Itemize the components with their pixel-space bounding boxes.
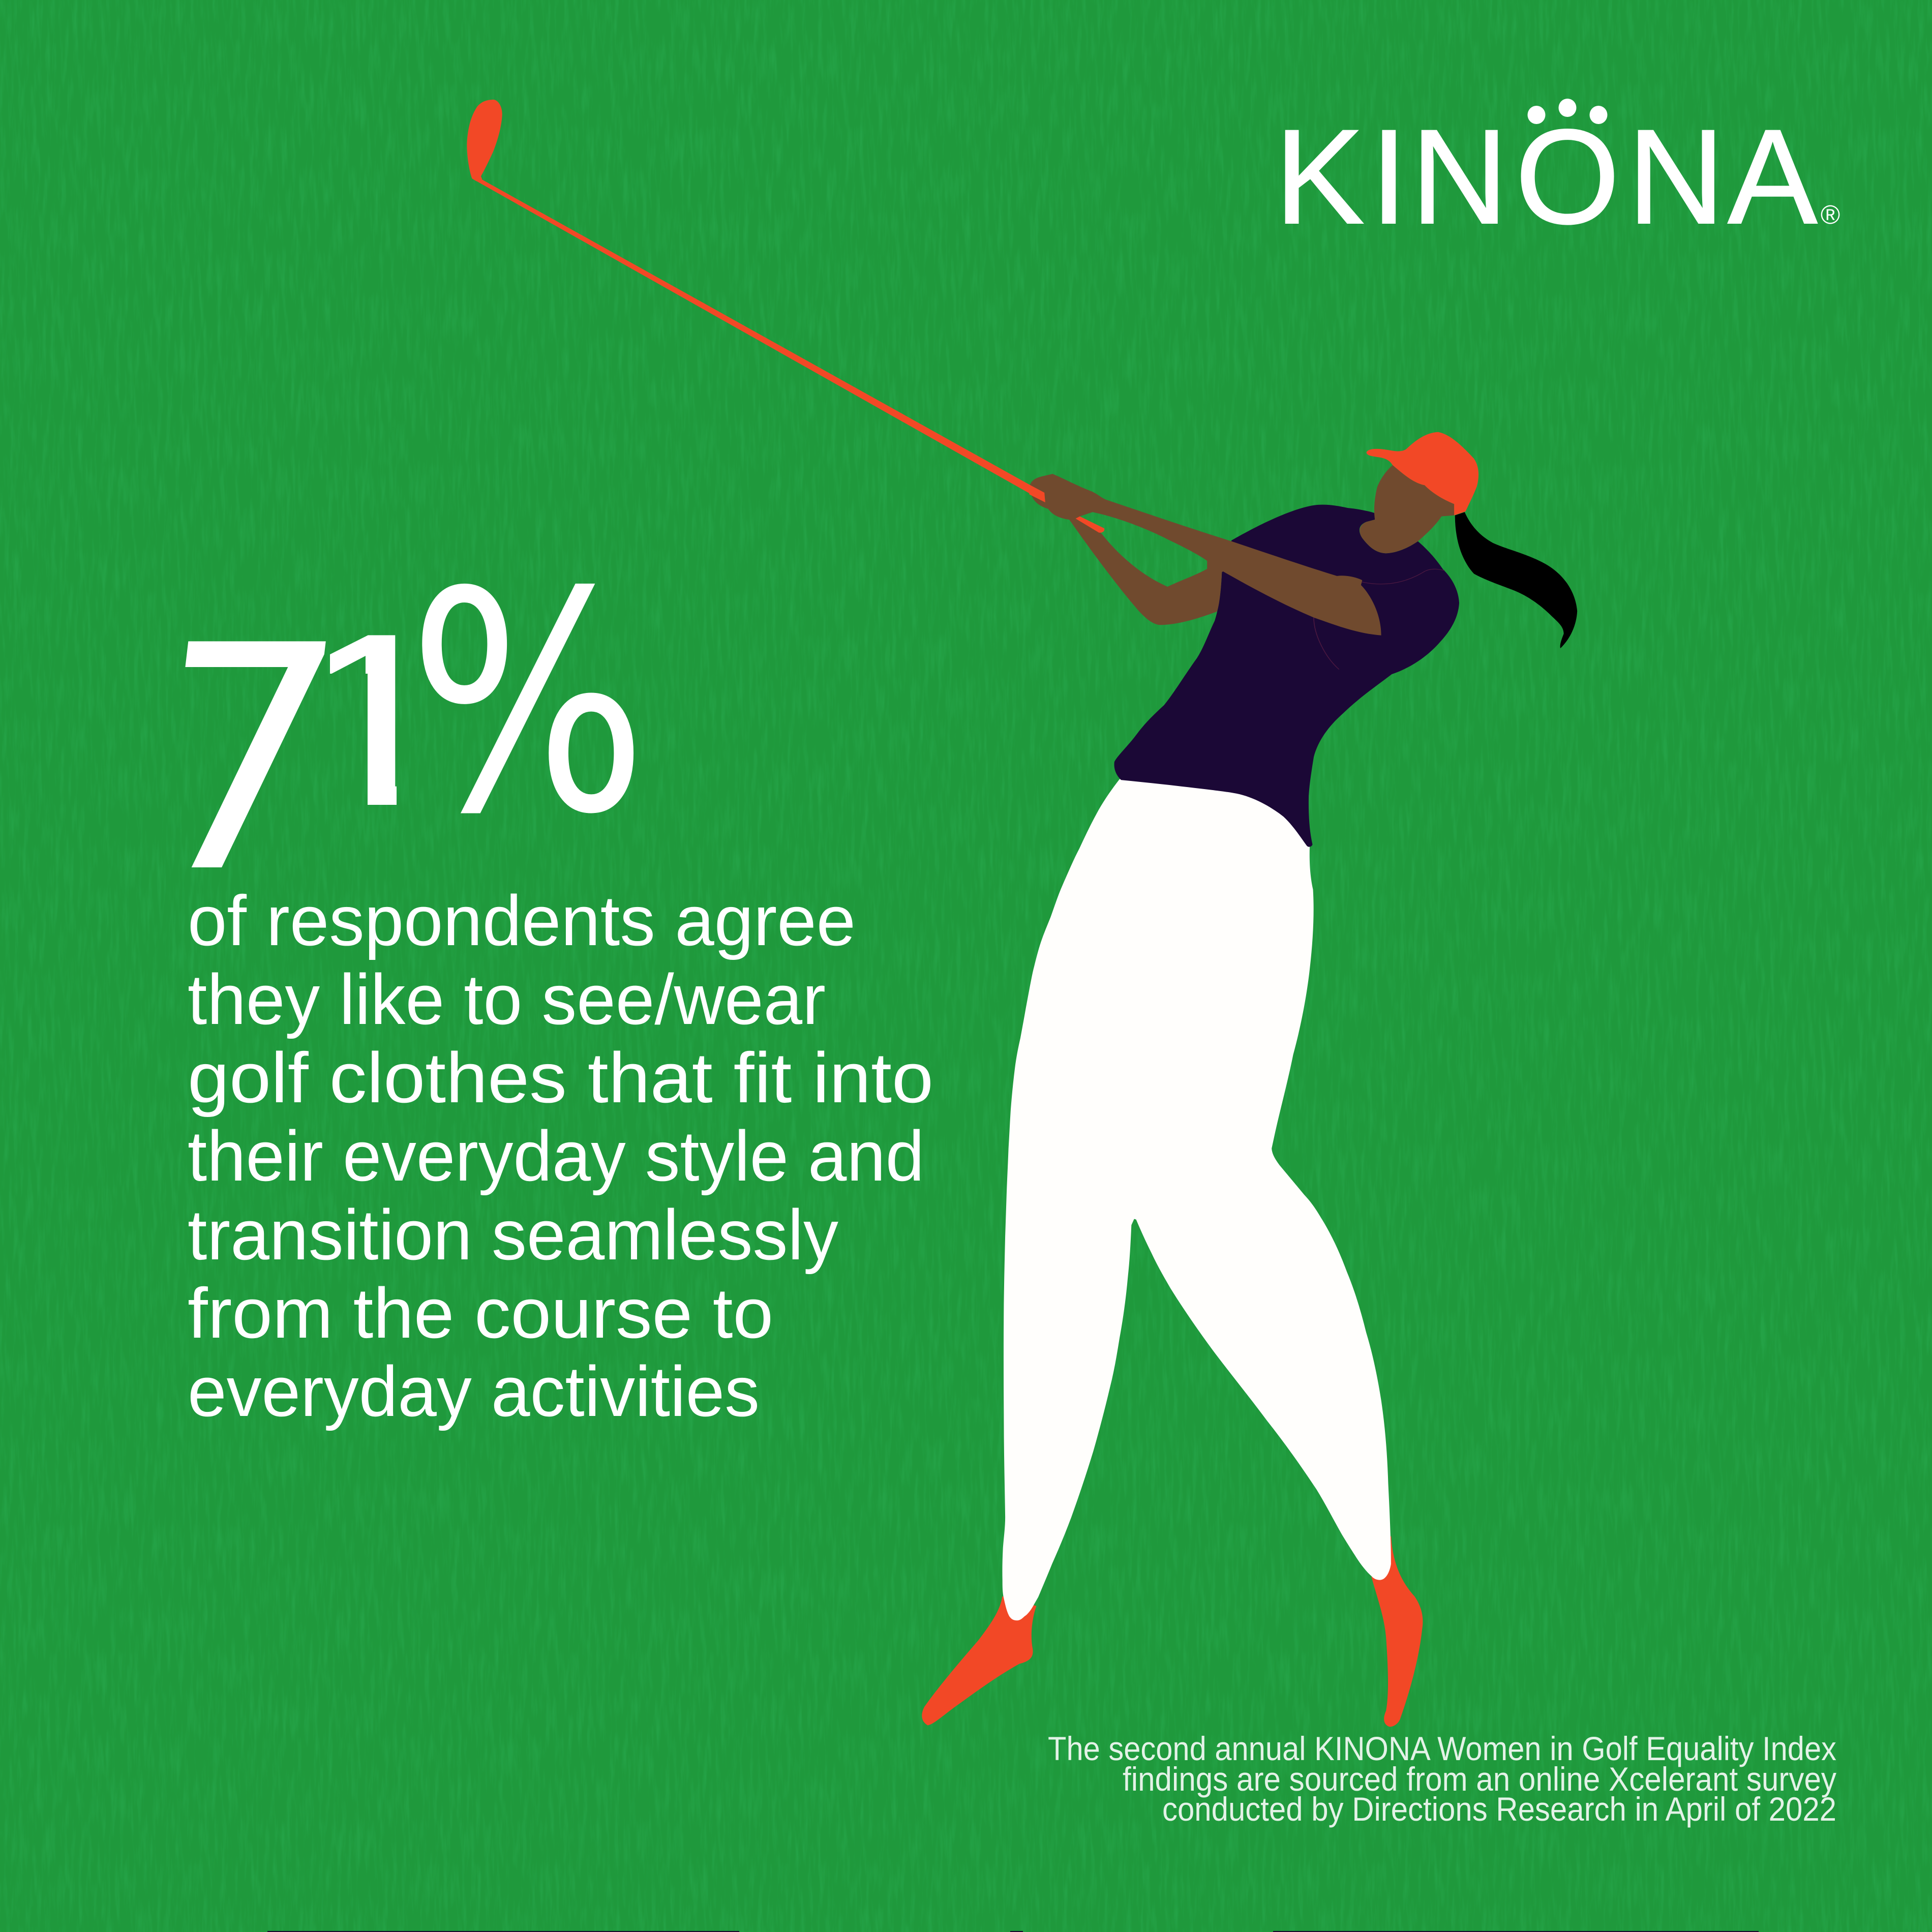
footnote: survey source: conducted by Directions Research in April of 2022 [1162, 1790, 1836, 1828]
body text: survey finding: of respondents agree [188, 881, 856, 960]
body text: survey finding: from the course to [188, 1273, 773, 1353]
club grip end [1076, 517, 1104, 533]
footnote: survey source [1048, 1730, 1836, 1828]
orange cap [1367, 432, 1478, 516]
big statistic: 71%: % [408, 528, 647, 881]
grip in hand [1029, 485, 1045, 502]
illustration: woman golfer swinging [467, 100, 1577, 1727]
body text: survey finding [188, 881, 933, 1431]
golf club [467, 100, 1045, 502]
white trousers [1002, 774, 1391, 1620]
face and neck [1360, 465, 1454, 553]
right sock [1372, 1535, 1423, 1727]
logo: KINONA wordmark: ® [1821, 200, 1840, 230]
ponytail [1455, 512, 1577, 648]
body text: survey finding: everyday activities [188, 1351, 760, 1431]
shirt [1114, 505, 1459, 847]
body text: survey finding: they like to see/wear [188, 959, 826, 1039]
footnote: survey source: findings are sourced from an online Xcelerant survey [1123, 1760, 1836, 1798]
logo: KINONA wordmark: KINONA [1275, 102, 1818, 252]
footnote: survey source: The second annual KINONA Women in Golf Equality Index [1048, 1730, 1836, 1767]
left sock [922, 1596, 1037, 1725]
arms and hands [1030, 474, 1381, 636]
big statistic: 71%: 1 [281, 582, 468, 857]
big statistic: 71%: 7 [129, 580, 358, 941]
bottom edge dark strips [267, 1931, 1759, 1932]
body text: survey finding: golf clothes that fit into [188, 1038, 933, 1118]
navy shirt, arms, head, cap, ponytail [1029, 432, 1577, 847]
shirt seams [1314, 569, 1444, 670]
big statistic: 71% [185, 584, 633, 867]
body text: survey finding: transition seamlessly [188, 1195, 838, 1275]
body text: survey finding: their everyday style and [188, 1116, 924, 1196]
